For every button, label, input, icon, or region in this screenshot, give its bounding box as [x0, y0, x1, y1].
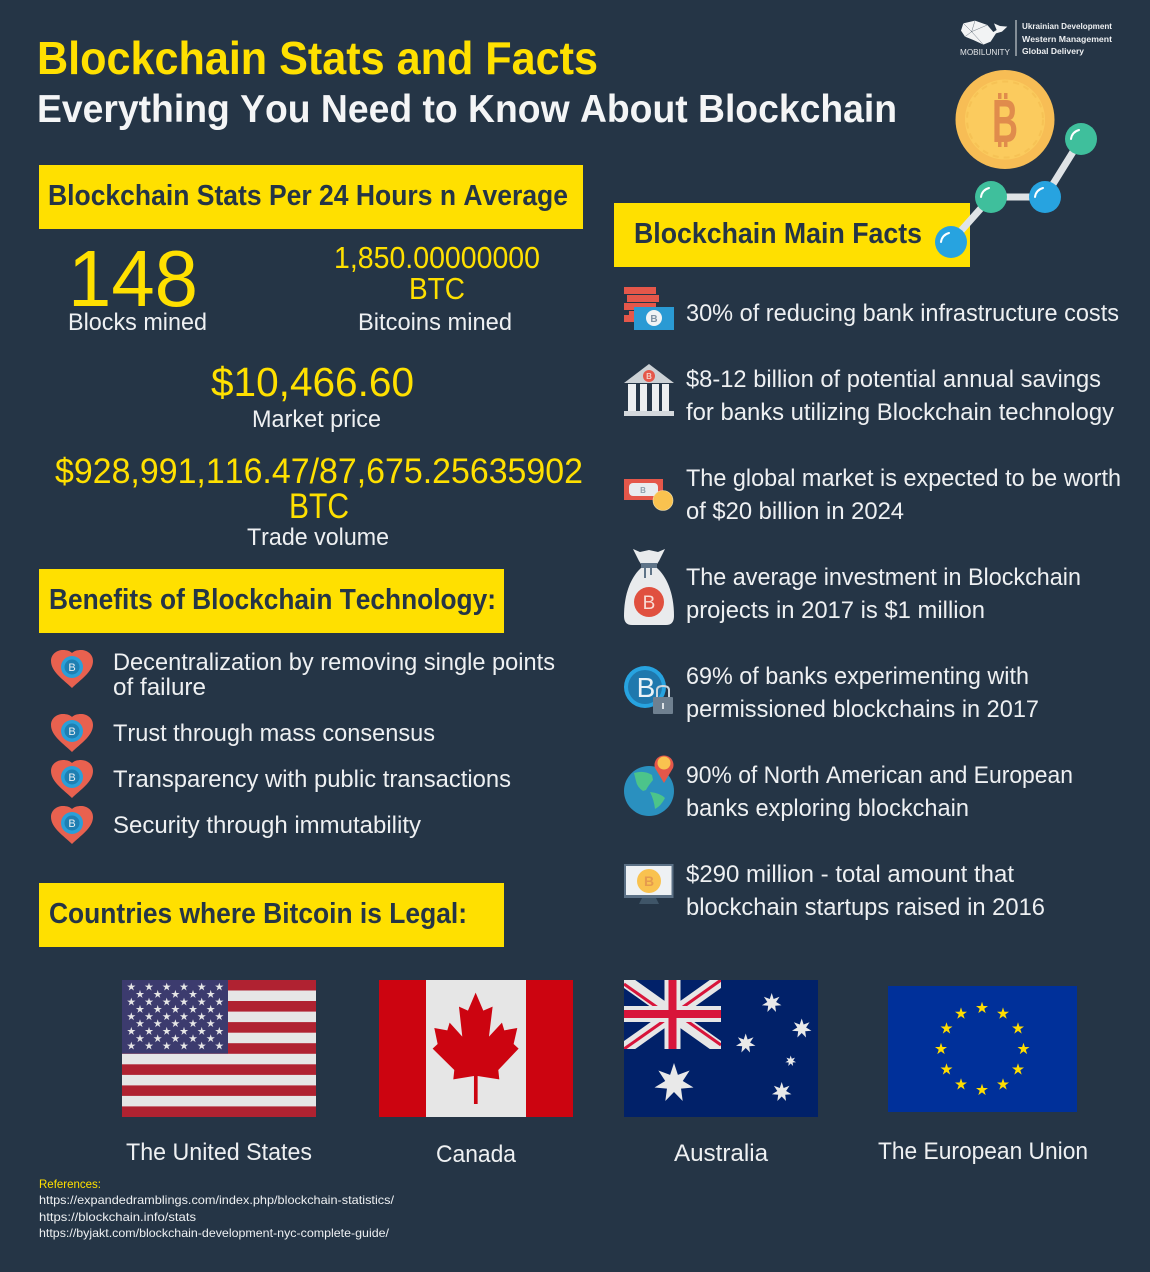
fact: permissioned blockchains: permissioned blockchains in 2017	[686, 696, 1039, 723]
icon: bank: B	[646, 372, 652, 381]
icon: heart 4	[51, 806, 93, 844]
stat: bitcoins mined: BTC	[409, 271, 465, 306]
fact: infrastructure costs: 30% of reducing bank infrastructure costs	[686, 300, 1119, 327]
heading: benefits	[39, 569, 504, 633]
stat: market price: $10,466.60	[211, 359, 414, 405]
stat: blocks mined: 148	[68, 234, 198, 323]
label: Canada: Canada	[436, 1141, 517, 1168]
fact: permissioned blockchains: 69% of banks experimenting with	[686, 663, 1029, 690]
icon: molecule chain	[935, 123, 1097, 258]
references: https://byjakt.com/blockchain-development-nyc-complete-guide/	[39, 1226, 390, 1240]
logo: Mobilunity: MOBILUNITY	[960, 48, 1011, 57]
references: References:	[39, 1177, 101, 1191]
flag: European Union	[888, 986, 1077, 1112]
label: The European Union: The European Union	[878, 1138, 1088, 1165]
heading: stats per 24 hours: Blockchain Stats Per 24 Hours n Average	[48, 180, 568, 212]
benefit: trust: Trust through mass consensus	[113, 720, 435, 747]
icon: monitor with coin	[624, 864, 674, 904]
icon: banknote and coin	[624, 479, 673, 510]
icon: money bag: B	[643, 593, 655, 614]
heading: benefits: Benefits of Blockchain Technology:	[49, 584, 496, 616]
label: Australia: Australia	[674, 1140, 769, 1167]
fact: exploring blockchain: 90% of North American and European	[686, 762, 1073, 789]
icon: heart 1	[51, 650, 93, 688]
benefit: decentralization	[113, 649, 555, 701]
icon: bricks and banknote: B	[650, 314, 658, 325]
fact: average investment	[624, 549, 1081, 625]
flag: Canada	[379, 980, 573, 1117]
references: https://blockchain.info/stats	[39, 1210, 196, 1224]
benefit: decentralization: of failure	[113, 674, 206, 701]
title	[37, 32, 897, 131]
benefit: transparency: Transparency with public transactions	[113, 766, 511, 793]
heading: main facts	[614, 203, 970, 267]
icon: bitcoin and padlock: B	[637, 672, 655, 703]
fact: global market: of $20 billion in 2024	[686, 498, 904, 525]
icon: money bag	[624, 549, 674, 625]
icon: whale	[961, 21, 1007, 45]
fact: annual savings: $8-12 billion of potential annual savings	[686, 366, 1101, 393]
stat: bitcoins mined	[334, 240, 540, 336]
icon: monitor with coin: B	[644, 873, 654, 889]
stat: trade volume: BTC	[289, 487, 349, 526]
fact: average investment: projects in 2017 is $1 million	[686, 597, 985, 624]
stat: trade volume	[55, 452, 583, 551]
icon: heart 3	[51, 760, 93, 798]
icon: bank	[624, 364, 674, 416]
references	[39, 1177, 395, 1240]
stat: market price	[211, 359, 414, 433]
fact: startups raised	[624, 861, 1045, 921]
icon: bitcoin coin: B	[992, 87, 1018, 155]
heading: stats per 24 hours	[39, 165, 583, 229]
stat: bitcoins mined: Bitcoins mined	[358, 309, 512, 336]
fact: global market	[624, 465, 1121, 525]
stat: market price: Market price	[252, 406, 381, 433]
flag: United States	[122, 980, 316, 1117]
stat: blocks mined: Blocks mined	[68, 309, 207, 336]
benefit: security: Security through immutability	[113, 812, 421, 839]
flag: Australia	[624, 980, 818, 1117]
fact: exploring blockchain	[624, 755, 1073, 822]
logo: Mobilunity: Western Management	[1022, 34, 1112, 44]
fact: global market: The global market is expected to be worth	[686, 465, 1121, 492]
label: The United States: The United States	[126, 1139, 312, 1166]
heading: countries	[39, 883, 504, 947]
stat: trade volume: Trade volume	[247, 524, 389, 551]
icon: bitcoin coin	[956, 70, 1054, 169]
icon: bitcoin and padlock	[624, 666, 673, 714]
stat: trade volume: $928,991,116.47/87,675.25635902	[55, 452, 583, 491]
fact: average investment: The average investment in Blockchain	[686, 564, 1081, 591]
list: benefits	[51, 649, 555, 844]
logo: Mobilunity: Global Delivery	[1022, 46, 1084, 56]
references: https://expandedramblings.com/index.php/blockchain-statistics/	[39, 1193, 395, 1207]
title: Everything You Need to Know About Blockchain	[37, 88, 897, 131]
heading: main facts: Blockchain Main Facts	[634, 218, 922, 250]
logo: Mobilunity	[960, 20, 1112, 57]
title: Blockchain Stats and Facts	[37, 32, 598, 84]
fact: startups raised: $290 million - total amount that	[686, 861, 1014, 888]
icon: globe and pin	[624, 755, 674, 816]
fact: infrastructure costs	[624, 287, 1119, 330]
fact: permissioned blockchains	[624, 663, 1039, 723]
icon: bricks and banknote	[624, 287, 674, 330]
fact: annual savings: for banks utilizing Blockchain technology	[686, 399, 1114, 426]
fact: startups raised: blockchain startups raised in 2016	[686, 894, 1045, 921]
heading: countries: Countries where Bitcoin is Legal:	[49, 898, 467, 930]
fact: annual savings	[624, 364, 1114, 426]
icon: heart 2	[51, 714, 93, 752]
icon: banknote and coin: B	[640, 486, 646, 495]
stat: bitcoins mined: 1,850.00000000	[334, 240, 540, 275]
benefit: decentralization: Decentralization by removing single points	[113, 649, 555, 676]
logo: Mobilunity: Ukrainian Development	[1022, 21, 1112, 31]
fact: exploring blockchain: banks exploring blockchain	[686, 795, 969, 822]
